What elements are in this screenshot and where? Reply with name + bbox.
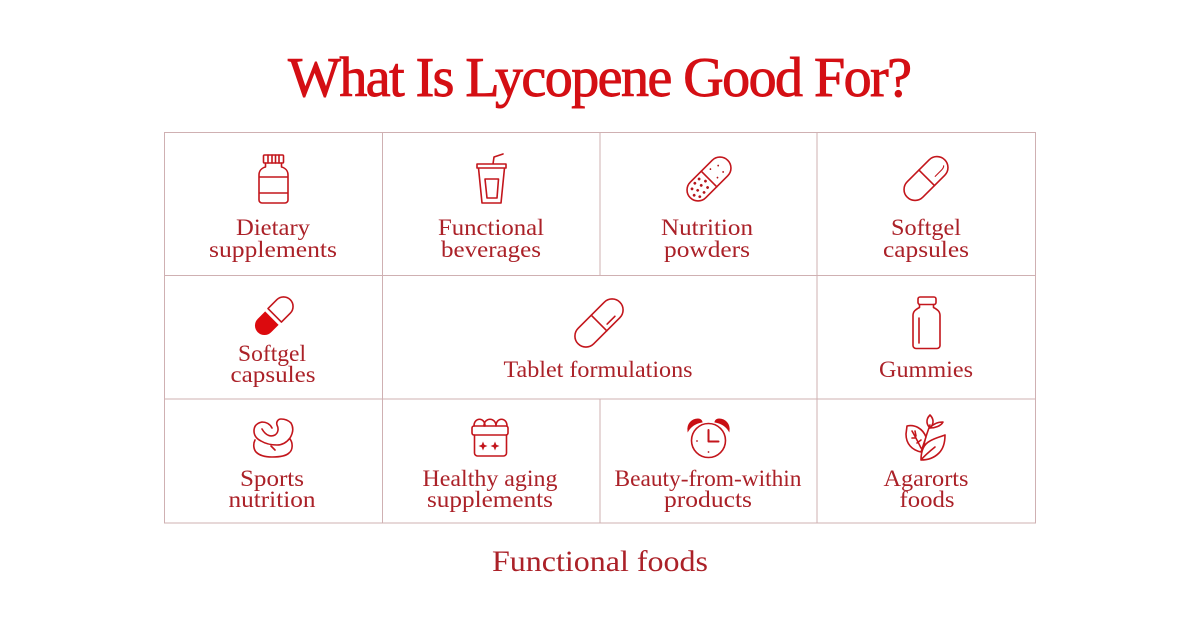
- cell: healthy aging supplements: [422, 419, 558, 512]
- icon: cup with straw: [477, 154, 506, 203]
- cell: functional beverages: [438, 154, 544, 262]
- label: products: [664, 487, 752, 512]
- footer label: Functional foods: [492, 545, 708, 578]
- label: supplements: [427, 487, 553, 512]
- label: Healthy aging: [422, 466, 558, 491]
- cell: softgel capsules top: [883, 152, 969, 262]
- label: Beauty-from-within: [614, 466, 802, 491]
- icon: capsule outline: [899, 152, 953, 205]
- label: supplements: [209, 237, 337, 262]
- icon: supplement bottle: [259, 155, 288, 203]
- label: foods: [900, 487, 955, 512]
- icon: box with stars: [472, 419, 508, 456]
- icon: gummies bottle: [913, 297, 940, 348]
- cell: sports nutrition: [228, 419, 316, 512]
- label: [209, 215, 337, 262]
- label: [614, 466, 802, 512]
- icon: tablet capsule: [570, 294, 628, 352]
- cell: softgel capsules filled: [230, 293, 316, 387]
- label: nutrition: [228, 487, 316, 512]
- label: [422, 466, 558, 512]
- cell: agarorts foods: [884, 415, 969, 512]
- cell: gummies: [879, 297, 973, 382]
- icon: leaves: [906, 415, 945, 460]
- icon: cashew shape: [254, 419, 293, 457]
- label: Gummies: [879, 357, 973, 382]
- title: What Is Lycopene Good For?: [288, 47, 912, 109]
- label: powders: [664, 237, 750, 262]
- label: Dietary: [236, 215, 311, 240]
- label: [230, 341, 316, 387]
- cell: tablet formulations: [504, 294, 693, 382]
- icon: half filled capsule: [251, 293, 297, 339]
- label: Sports: [240, 466, 304, 491]
- label: Tablet formulations: [504, 357, 693, 382]
- label: capsules: [230, 362, 316, 387]
- label: [884, 466, 969, 512]
- icon: alarm clock: [692, 424, 726, 458]
- cell: nutrition powders: [661, 152, 754, 262]
- label: [438, 215, 544, 262]
- cell: beauty-from-within products: [614, 419, 802, 512]
- label: capsules: [883, 237, 969, 262]
- label: [228, 466, 316, 512]
- label: [883, 215, 969, 262]
- icon: speckled capsule: [682, 152, 736, 206]
- label: Softgel: [238, 341, 306, 366]
- label: [661, 215, 754, 262]
- label: Functional: [438, 215, 544, 240]
- label: Agarorts: [884, 466, 969, 491]
- label: Nutrition: [661, 215, 754, 240]
- label: beverages: [441, 237, 541, 262]
- cell: dietary supplements: [209, 155, 337, 262]
- label: Softgel: [891, 215, 961, 240]
